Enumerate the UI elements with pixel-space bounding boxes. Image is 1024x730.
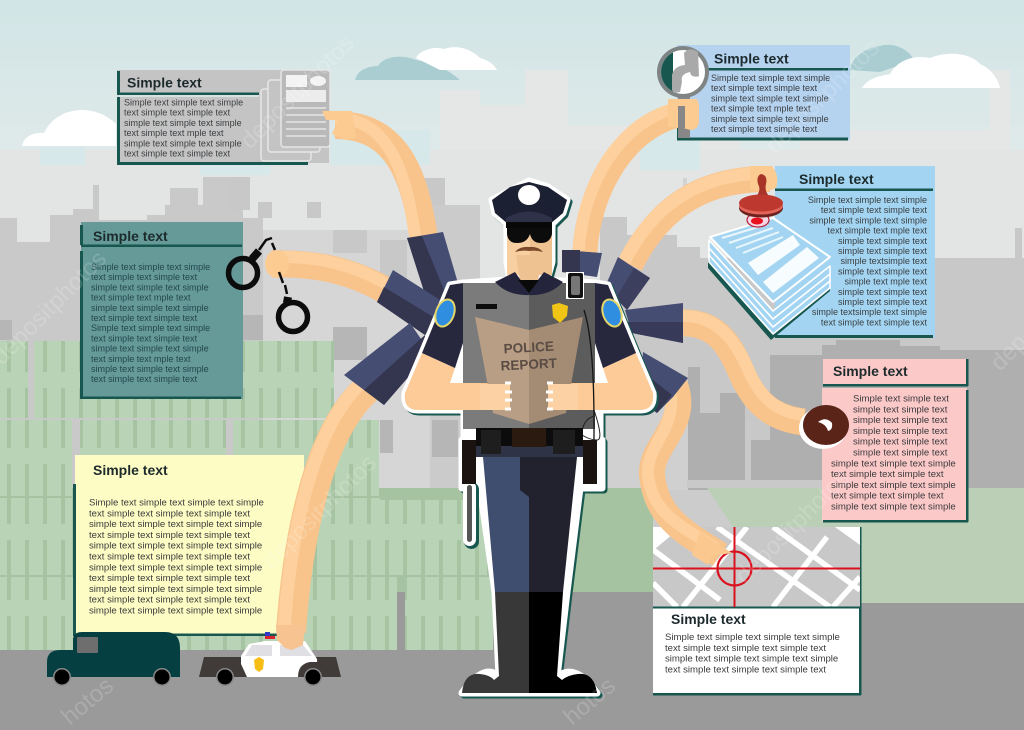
car badge — [254, 657, 264, 672]
body text: Simple text simple text simple text simple — [89, 498, 264, 508]
watermarks: hotos — [57, 672, 119, 730]
police car — [199, 632, 341, 686]
arms — [405, 353, 653, 410]
icon: donut — [799, 405, 849, 449]
cloud: right white — [862, 54, 1000, 88]
body text: text simple text simple text — [91, 272, 198, 282]
body text: text simple text simple text — [91, 333, 198, 343]
body text: simple text simple text — [853, 437, 948, 448]
body text: simple text simple text simple — [711, 114, 829, 124]
panel: pink right — [822, 359, 968, 522]
body text: text simple text simple text simple text — [89, 595, 250, 606]
police officer — [405, 181, 655, 695]
map — [640, 527, 860, 607]
cloud: top white — [416, 47, 497, 70]
heading: Simple text — [93, 228, 168, 244]
sunglasses — [507, 228, 552, 243]
body text: text simple text simple text simple text — [89, 530, 250, 541]
heading: Simple text — [714, 50, 789, 66]
heading: Simple text — [127, 74, 202, 90]
body text: simple text simple text — [853, 448, 948, 458]
body text: simple text simple text simple — [124, 118, 242, 128]
body text: text simple text simple text — [831, 491, 944, 502]
police cap — [492, 182, 567, 228]
panel: blue top-right — [677, 45, 850, 140]
body text: simple text simple text simple text simple — [89, 606, 262, 616]
duty belt — [476, 428, 583, 457]
road — [0, 592, 1024, 730]
body text: simple text simple text — [838, 287, 927, 297]
body text: text simple text simple text — [821, 205, 927, 215]
collar — [495, 272, 563, 295]
figure shadow — [407, 183, 655, 695]
police van — [47, 632, 180, 686]
cloud: left white — [22, 110, 116, 146]
radio — [566, 272, 600, 440]
body text: simple text simple text simple — [91, 282, 209, 292]
watermarks: depositphotos — [257, 449, 382, 574]
body text: text simple text mple text — [711, 104, 811, 114]
moustache — [515, 247, 543, 252]
panel: yellow lower-left — [73, 455, 304, 636]
body text: text simple text simple text — [831, 469, 944, 480]
body text: Simple text simple text simple — [124, 98, 243, 108]
body text: simple text simple text — [838, 266, 927, 276]
arm: stamp — [605, 166, 777, 310]
arm: map pointer — [640, 352, 732, 565]
body text: simple text simple text simple — [91, 344, 209, 354]
panel: gray top-left — [117, 70, 329, 165]
body text: simple text simple text — [853, 404, 948, 415]
baton — [465, 483, 476, 546]
report title: POLICE — [503, 339, 554, 356]
body text: text simple text mple text — [827, 226, 927, 236]
arm: magnifier — [562, 107, 682, 277]
body text: text simple text simple text — [124, 148, 231, 158]
shoulder patches — [432, 297, 625, 329]
heading: Simple text — [671, 611, 746, 627]
police report folder — [475, 317, 583, 424]
heading: Simple text — [833, 363, 908, 379]
body text: text simple text simple text simple text — [89, 573, 250, 584]
body text: simple text simple text simple — [124, 138, 242, 148]
red crosshair — [653, 527, 860, 607]
gold badge — [552, 303, 568, 323]
body text: simple text simple text — [838, 246, 927, 256]
body text: text simple text simple text simple text — [89, 552, 250, 562]
body text: simple text simple text — [838, 297, 927, 307]
icon: stamp — [739, 174, 783, 227]
arm: handcuffs — [265, 250, 448, 335]
body text: simple text simple text simple — [831, 480, 956, 491]
icon: magnifier — [657, 46, 709, 138]
body text: simple text mple text — [845, 277, 927, 287]
body text: simple text simple text simple text simple — [89, 541, 262, 552]
body text: text simple text simple text — [711, 124, 818, 134]
body text: Simple text simple text — [853, 394, 949, 404]
body text: simple text simple text — [853, 415, 948, 426]
cloud: top teal — [355, 57, 460, 80]
body text: simple text simple text simple — [711, 93, 829, 103]
body text: Simple text simple text simple text simple — [665, 632, 840, 643]
body text: text simple text simple text — [821, 317, 927, 327]
body text: Simple text simple text simple — [91, 323, 210, 333]
body text: simple text simple text simple text simple — [89, 562, 262, 573]
green ground right — [653, 488, 1024, 603]
watermarks: depositphotos — [235, 29, 360, 154]
body text: Simple text simple text simple — [711, 73, 830, 83]
arm: police car — [276, 323, 430, 650]
body text: Simple text simple text simple — [808, 195, 927, 205]
name tag — [476, 304, 497, 309]
hands — [480, 383, 578, 410]
body text: simple text simple text simple — [831, 458, 956, 469]
shipping containers — [0, 341, 493, 650]
holster — [462, 440, 476, 484]
boots — [462, 592, 597, 693]
body text: simple text simple text simple text simple — [89, 584, 262, 595]
neck shadow — [518, 280, 539, 293]
body text: text simple text simple text simple text — [665, 664, 826, 675]
body text: simple text simple text simple — [809, 215, 927, 225]
cloud: right teal — [850, 45, 914, 72]
pouch — [583, 440, 597, 484]
body text: simple text simple text simple — [91, 364, 209, 374]
body text: simple textsimple text — [841, 256, 927, 266]
watermarks: depositphotos — [730, 464, 855, 589]
sleeves — [422, 283, 636, 368]
report title line 2: REPORT — [500, 356, 558, 373]
icon: report stack — [708, 218, 830, 340]
vest — [463, 283, 595, 429]
body text: simple text simple text simple — [831, 502, 956, 512]
arm: documents — [322, 111, 460, 310]
green ground — [0, 488, 653, 592]
head — [507, 225, 552, 282]
arm: donut — [625, 303, 804, 422]
car siren — [265, 632, 275, 639]
body text: text simple text simple text simple text — [665, 643, 826, 654]
panel: map with target — [640, 527, 862, 696]
body text: text simple text mple text — [91, 293, 191, 303]
body text: text simple text simple text — [711, 83, 818, 93]
heading: Simple text — [93, 462, 168, 478]
body text: simple text simple text simple text simple — [665, 654, 838, 665]
watermarks: depositphotos — [760, 34, 885, 159]
icon: stack of documents — [261, 70, 330, 161]
body text: simple textsimple text simple — [812, 307, 927, 317]
watermarks: hotos — [559, 672, 621, 730]
background: city skyline — [0, 70, 1024, 490]
figure white outline — [405, 181, 653, 693]
body text: text simple text simple text — [91, 374, 198, 384]
body text: text simple text simple text — [91, 313, 198, 323]
body text: text simple text simple text — [124, 108, 231, 118]
trousers — [483, 457, 577, 592]
background: sky — [0, 0, 1024, 150]
body text: text simple text mple text — [91, 354, 191, 364]
panel: teal left — [80, 222, 243, 399]
panel: sky blue right — [775, 166, 935, 338]
body text: text simple text simple text simple text — [89, 508, 250, 519]
body text: simple text simple text simple — [91, 303, 209, 313]
body text: simple text simple text simple text simple — [89, 519, 262, 530]
body text: Simple text simple text simple — [91, 262, 210, 272]
body text: text simple text mple text — [124, 128, 224, 138]
body text: simple text simple text — [838, 236, 927, 246]
body text: simple text simple text — [853, 426, 948, 437]
heading: Simple text — [799, 171, 874, 187]
icon: handcuffs — [228, 238, 308, 332]
